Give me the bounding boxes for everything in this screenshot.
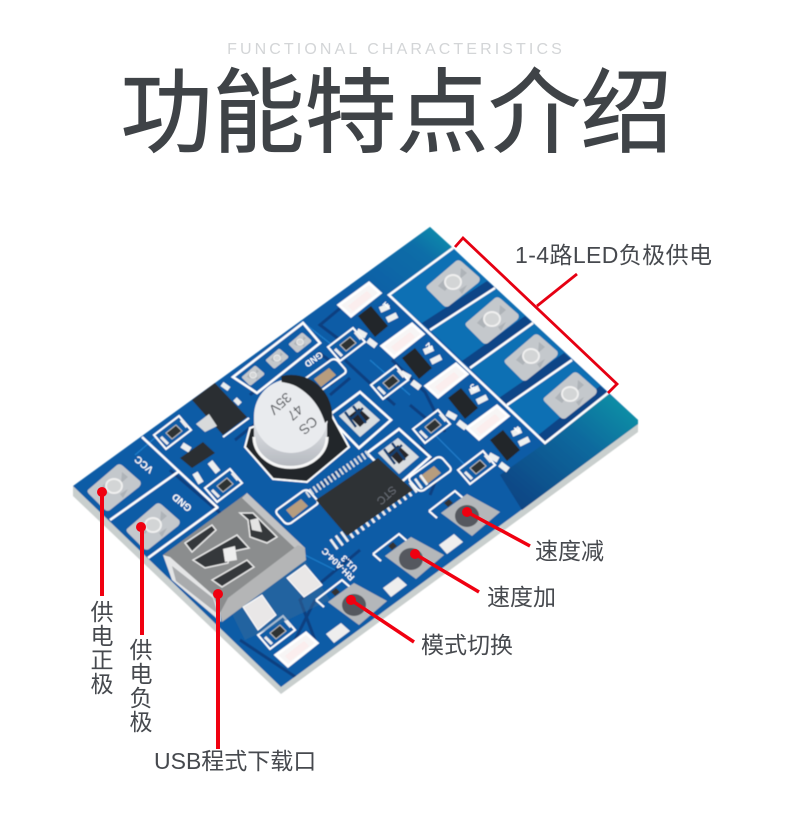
IC chip: STC xyxy=(374,483,398,507)
callout: LED bracket xyxy=(455,238,617,393)
connector slots xyxy=(185,513,277,587)
small resistors xyxy=(154,416,295,649)
callout: speed up xyxy=(410,549,479,592)
label: LED: 1-4路LED负极供电 xyxy=(515,242,712,268)
tantalum capacitors xyxy=(276,359,451,524)
label: speed down: 速度减 xyxy=(535,538,604,564)
regulator xyxy=(192,383,249,437)
capacitor print xyxy=(265,389,321,438)
LEDs, transistors, resistors: 3 xyxy=(467,381,479,393)
mini USB connector xyxy=(163,493,330,640)
LEDs, transistors, resistors: 4 xyxy=(511,423,523,435)
PCB board xyxy=(73,227,638,694)
callout: USB xyxy=(213,589,223,749)
label: power positive: 供电正极 xyxy=(87,600,114,696)
IC chip xyxy=(307,452,425,545)
callout: speed down xyxy=(462,507,530,546)
silkscreen text: U1.3 xyxy=(339,553,359,574)
LEDs, transistors, resistors: 2 xyxy=(423,340,435,352)
tact buttons xyxy=(316,491,500,643)
large capacitor xyxy=(245,378,349,482)
solder pads near connector xyxy=(243,565,322,630)
label: power negative: 供电负极 xyxy=(126,638,152,734)
board side edge xyxy=(73,420,638,694)
VCC and GND power pads xyxy=(88,437,218,558)
LEDs, transistors, resistors: 1 xyxy=(380,299,392,311)
VCC and GND power pads: VCC xyxy=(133,453,156,475)
header pads with frame xyxy=(233,323,325,393)
capacitor print: CS xyxy=(296,413,321,438)
callout: power positive xyxy=(97,487,107,596)
label: mode switch: 模式切换 xyxy=(421,632,513,658)
header pads with frame: GND xyxy=(302,350,325,370)
title: 功能特点介绍 xyxy=(120,63,673,165)
VCC and GND power pads: GND xyxy=(170,491,194,513)
resistor packs xyxy=(328,392,430,485)
board surface xyxy=(73,227,638,687)
callout: mode switch xyxy=(346,595,414,642)
LED output channels xyxy=(389,248,608,443)
right end xyxy=(500,393,638,510)
traces xyxy=(135,300,470,680)
teal top end xyxy=(350,227,453,307)
capacitor print: 47 xyxy=(284,402,306,424)
silkscreen text: RH-A04-C xyxy=(319,546,356,583)
capacitor print: 35V xyxy=(265,389,295,418)
status LED xyxy=(276,633,317,666)
LED pads 1-4 xyxy=(426,260,597,419)
label: speed up: 速度加 xyxy=(487,584,556,610)
callout: power negative xyxy=(136,522,146,635)
label: USB: USB程式下载口 xyxy=(154,748,316,774)
subtitle: FUNCTIONAL CHARACTERISTICS xyxy=(227,41,565,58)
small transistor xyxy=(180,442,218,483)
LEDs, transistors, resistors xyxy=(328,283,529,484)
